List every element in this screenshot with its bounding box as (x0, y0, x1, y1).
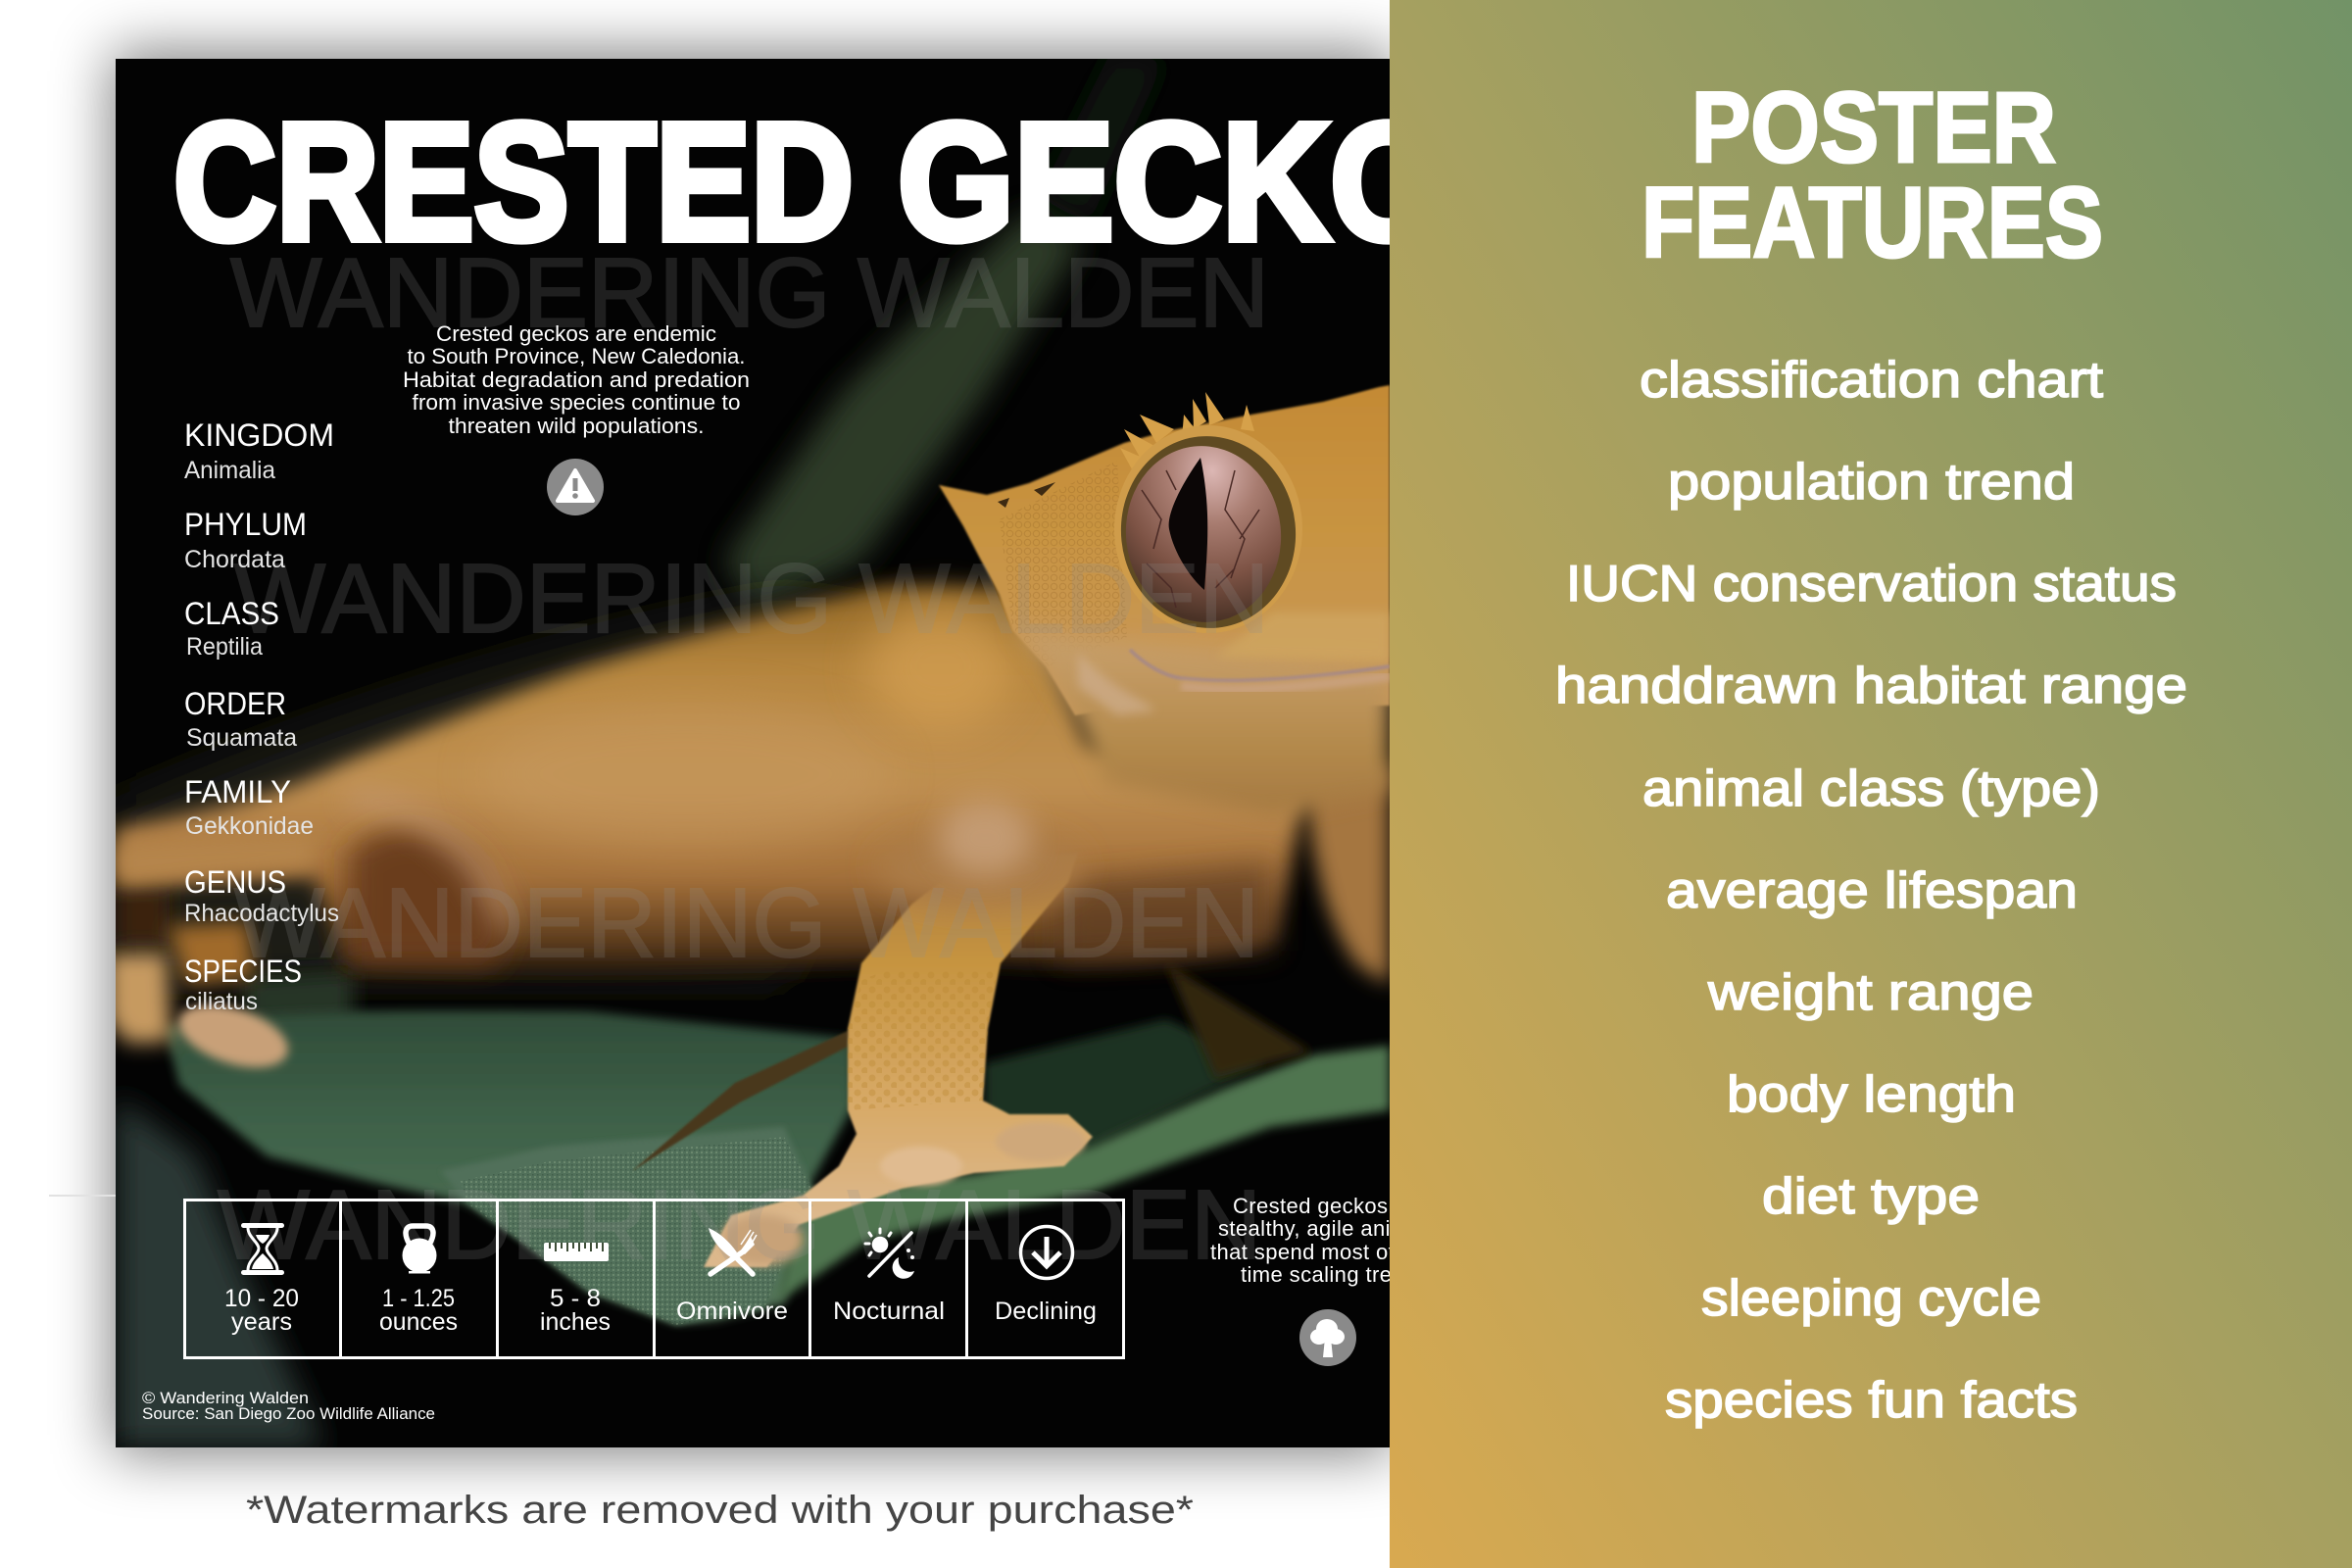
classification chart: Squamata (186, 724, 297, 752)
heading: FEATURES (1642, 167, 2103, 278)
classification chart: GENUS (184, 864, 286, 900)
icon: tree (1299, 1309, 1356, 1366)
feature list: sleeping cycle (1701, 1270, 2041, 1327)
icon: hourglass (241, 1223, 284, 1275)
stat labels: 5 - 8 (550, 1285, 601, 1312)
watermarks: WANDERING WALDEN (234, 868, 1259, 978)
panel: stats strip (184, 1200, 1123, 1358)
text block: fun fact: that spend most of their (1210, 1240, 1446, 1264)
text block: fun fact: time scaling trees (1241, 1262, 1415, 1287)
icon: ruler (544, 1243, 609, 1261)
title (176, 119, 1390, 245)
text block: fun fact (1210, 1194, 1446, 1287)
text block: fun fact: Crested geckos are (1233, 1194, 1427, 1218)
text block: conservation note: threaten wild populations. (449, 414, 704, 438)
credits: Source: San Diego Zoo Wildlife Alliance (142, 1404, 435, 1423)
classification chart: ciliatus (185, 988, 258, 1015)
feature list: animal class (type) (1642, 760, 2100, 817)
feature list: species fun facts (1665, 1372, 2078, 1429)
feature list: handdrawn habitat range (1555, 658, 2187, 714)
icon: declining arrow (1021, 1227, 1072, 1278)
classification chart: SPECIES (184, 954, 302, 989)
leaf (164, 963, 1390, 1325)
icon: sun and moon (865, 1229, 914, 1279)
stat labels: 10 - 20 (224, 1285, 299, 1312)
stat labels: Declining (995, 1298, 1097, 1325)
feature list: body length (1727, 1066, 2016, 1123)
icon: warning (547, 459, 604, 515)
classification chart: CLASS (184, 596, 279, 631)
stat labels: years (231, 1308, 292, 1336)
text block: conservation note: from invasive species continue to (412, 390, 741, 415)
panel: poster preview (108, 59, 1446, 1447)
feature list: diet type (1762, 1168, 1980, 1225)
photo: crested gecko on leaf (108, 59, 1390, 1447)
classification chart: Animalia (184, 457, 275, 484)
watermarks (218, 238, 1269, 1280)
title: CRESTED (173, 89, 854, 275)
stat labels: Nocturnal (833, 1298, 945, 1325)
watermarks: WANDERING WALDEN (234, 544, 1269, 654)
head (939, 385, 1390, 815)
feature list: weight range (1707, 964, 2034, 1021)
panel: poster features (1390, 0, 2352, 1568)
classification chart: Rhacodactylus (184, 900, 339, 927)
classification chart: FAMILY (184, 774, 291, 809)
title: GECKO (898, 89, 1446, 275)
icon: kettlebell (402, 1226, 437, 1274)
far front leg (1303, 764, 1390, 985)
watermarks: WANDERING WALDEN (218, 1170, 1261, 1280)
text block: conservation note (403, 321, 750, 438)
stat labels: 1 - 1.25 (382, 1285, 455, 1312)
front leg (704, 801, 1093, 1267)
heading (1642, 72, 2103, 278)
feature list: average lifespan (1666, 862, 2078, 919)
rear foot (108, 921, 296, 1080)
classification chart (184, 417, 339, 1015)
watermark notice: *Watermarks are removed with your purchase* (246, 1489, 1194, 1532)
classification chart: KINGDOM (184, 417, 334, 453)
stat labels: Omnivore (676, 1298, 788, 1325)
credits: © Wandering Walden (142, 1389, 309, 1407)
text block: conservation note: Habitat degradation and predation (403, 368, 750, 392)
feature list (1555, 352, 2187, 1429)
text block: conservation note: Crested geckos are endemic (436, 321, 716, 346)
credits (142, 1389, 435, 1423)
classification chart: Gekkonidae (185, 812, 314, 840)
classification chart: Reptilia (186, 633, 263, 661)
heading: POSTER (1691, 72, 2056, 183)
classification chart: PHYLUM (184, 507, 307, 542)
stat labels: inches (540, 1308, 611, 1336)
classification chart: Chordata (184, 546, 285, 573)
stat labels: ounces (379, 1308, 458, 1336)
watermarks: WANDERING WALDEN (230, 238, 1269, 348)
feature list: classification chart (1640, 352, 2104, 409)
eye (1121, 436, 1296, 628)
text block: conservation note: to South Province, New Caledonia. (408, 344, 745, 368)
feature list: population trend (1668, 454, 2075, 511)
poster drop shadow (112, 51, 1394, 1454)
stat labels (224, 1285, 1097, 1336)
feature list: IUCN conservation status (1566, 556, 2177, 612)
classification chart: ORDER (184, 686, 286, 721)
background foliage (116, 59, 1166, 1447)
icon: knife and fork (709, 1228, 757, 1274)
text block: fun fact: stealthy, agile animals (1218, 1216, 1438, 1241)
body (116, 586, 1308, 974)
